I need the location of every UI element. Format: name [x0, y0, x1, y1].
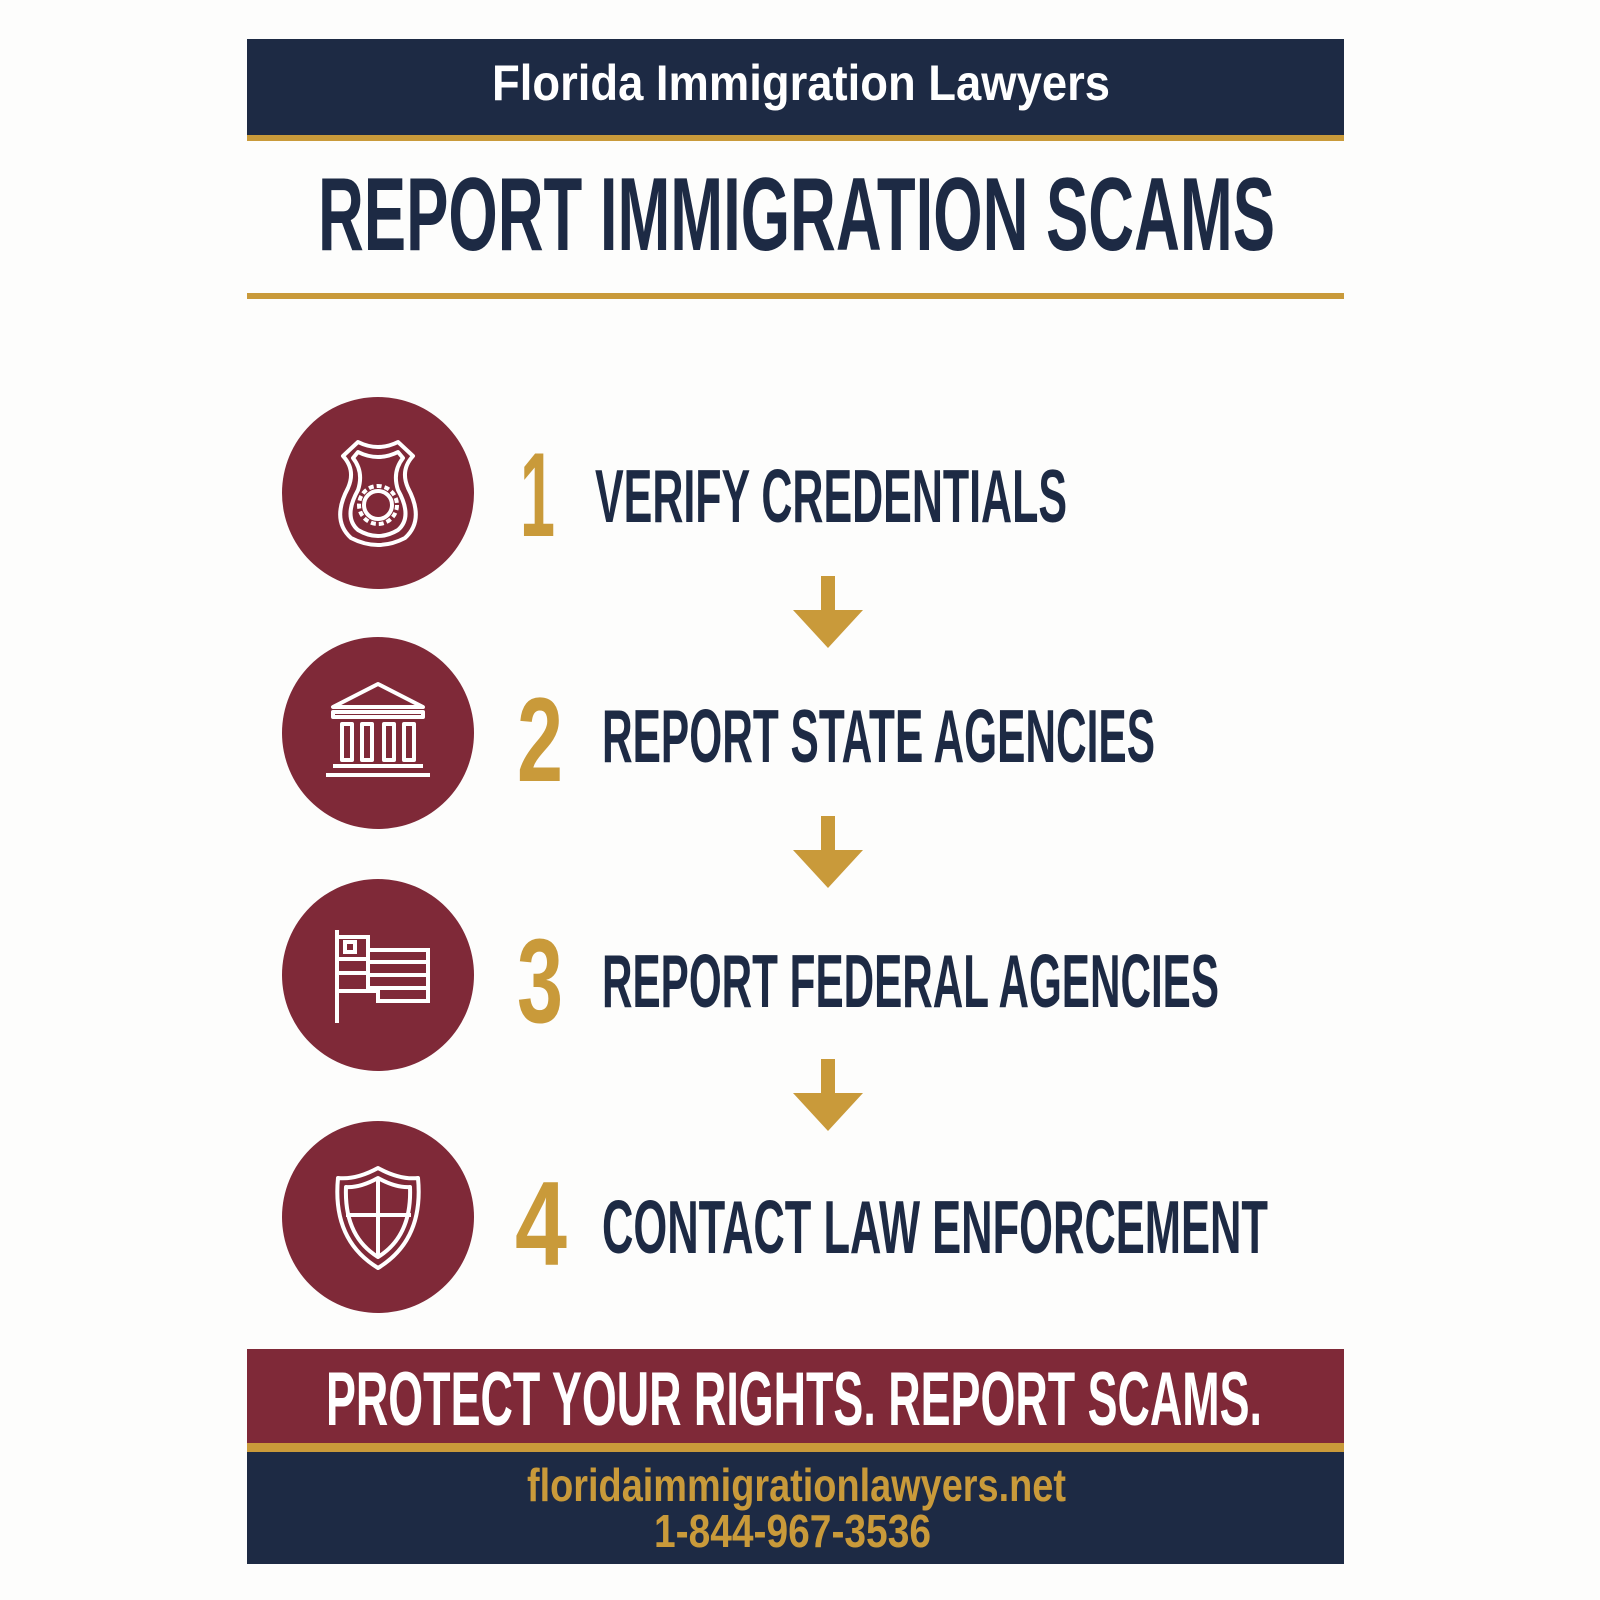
icon: badge — [282, 397, 474, 589]
step 2 — [282, 637, 1155, 829]
step 4 — [282, 1121, 1268, 1313]
number 3: 3 — [517, 914, 563, 1048]
arrow 2 — [793, 816, 863, 888]
contact panel: floridaimmigrationlawyers.net — [527, 1459, 1066, 1511]
icon: shield — [282, 1121, 474, 1313]
icon: government building — [282, 637, 474, 829]
icon: flag — [282, 879, 474, 1071]
label 1: VERIFY CREDENTIALS — [595, 454, 1067, 538]
label 2: REPORT STATE AGENCIES — [602, 694, 1155, 778]
number 4: 4 — [515, 1157, 567, 1291]
contact panel: 1-844-967-3536 — [654, 1505, 931, 1557]
header bar: Florida Immigration Lawyers — [492, 55, 1110, 111]
step 1 — [282, 397, 1067, 589]
arrow 3 — [793, 1059, 863, 1131]
number 1: 1 — [520, 428, 555, 562]
number 2: 2 — [517, 673, 563, 807]
footer banner — [247, 1349, 1344, 1452]
contact panel — [247, 1452, 1344, 1564]
header bar — [247, 39, 1344, 141]
arrow 1 — [793, 576, 863, 648]
step 3 — [282, 879, 1219, 1071]
